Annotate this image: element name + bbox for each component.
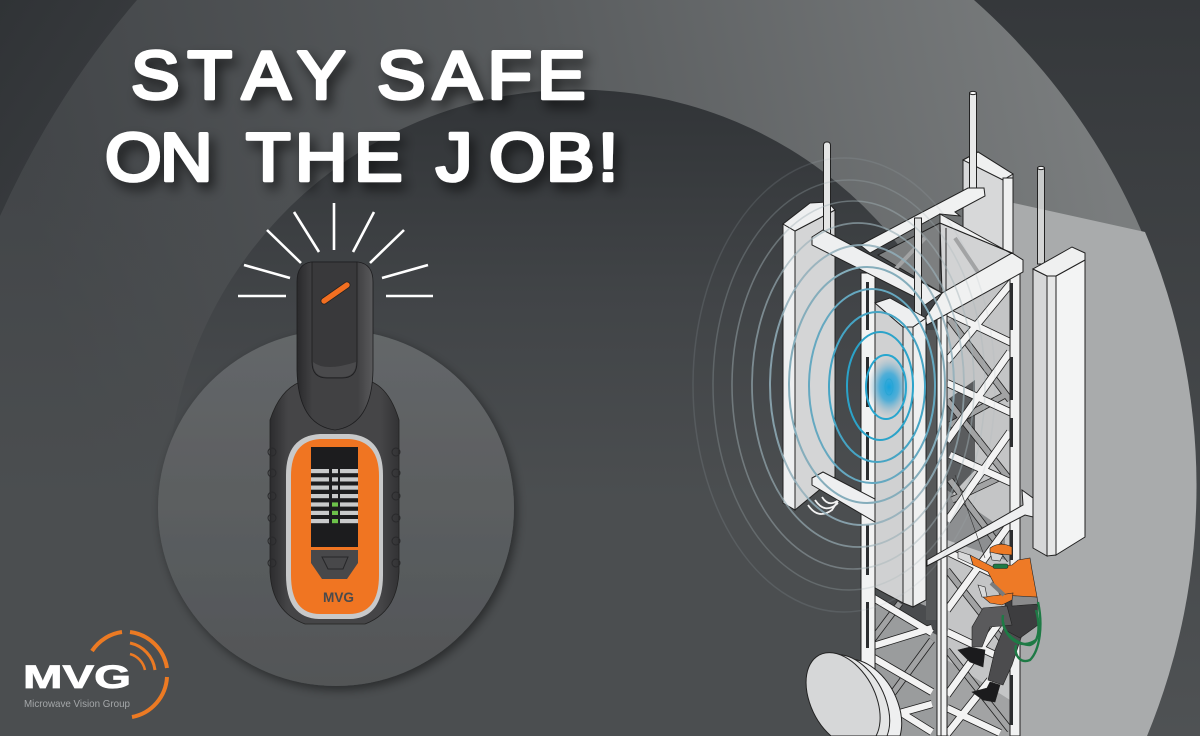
clip lip: [313, 362, 356, 377]
lower arm: [983, 593, 1013, 605]
grey frame: [286, 434, 383, 619]
right antenna panel: [1033, 247, 1085, 556]
title: ON THE JOB!: [105, 119, 618, 195]
centre rod: [914, 218, 922, 315]
level bars: [311, 469, 358, 523]
orange face: [291, 439, 379, 614]
device: RF personal monitor: [268, 262, 400, 624]
worker climbing tower: [955, 475, 1040, 702]
radio waves: [693, 158, 995, 612]
lattice front braces: [867, 282, 1012, 734]
left lower arm: [812, 472, 875, 522]
dish antenna: [806, 653, 902, 736]
logo wordmark: MVG: [23, 659, 131, 695]
device logo: MVG: [323, 589, 354, 605]
cable loops: [808, 490, 845, 514]
panel: device disc: [158, 330, 514, 686]
title: [105, 37, 618, 195]
button: [311, 550, 358, 579]
tower legs: [861, 270, 1020, 736]
lattice background: [868, 280, 1012, 736]
front-right band: [925, 253, 1023, 325]
belt clip: [297, 262, 373, 430]
torso and arm: [970, 555, 1037, 597]
safety line: [955, 475, 985, 558]
indicator fill: [324, 285, 347, 301]
left upper arm: [812, 230, 942, 305]
left antenna panel: [783, 202, 835, 510]
back-right band: [940, 214, 1023, 260]
orange indicator outline: [324, 285, 347, 301]
clip inner panel: [312, 262, 357, 378]
tool: [991, 583, 1004, 595]
leg slots: [866, 282, 1013, 725]
title: STAY SAFE: [131, 37, 586, 113]
display: [311, 447, 358, 547]
device body: [270, 382, 399, 624]
front leg: [972, 606, 1012, 647]
back leg: [988, 625, 1022, 685]
platform hole: [878, 223, 1012, 293]
illustration: telecom tower: [783, 91, 1085, 736]
left rod: [824, 142, 830, 237]
gloves: [958, 551, 987, 597]
back rod and panel: [963, 91, 1044, 264]
hips: [1005, 598, 1038, 638]
helmet: [990, 544, 1012, 555]
logo tagline: Microwave Vision Group: [24, 698, 130, 710]
chest device: [993, 564, 1008, 568]
lattice rear braces: [870, 320, 1010, 734]
front antenna panel: [875, 298, 926, 607]
button inner outline: [322, 557, 348, 569]
harness: [1012, 594, 1038, 606]
boots: [958, 647, 1000, 702]
face: [990, 552, 1003, 561]
side buttons: [268, 448, 400, 567]
right lower arm: [927, 490, 1033, 566]
green rope: [1003, 602, 1040, 661]
icon: alert rays: [238, 203, 433, 296]
logo: MVG: [23, 632, 167, 717]
logo arcs: [92, 632, 167, 717]
back arm: [860, 188, 985, 253]
